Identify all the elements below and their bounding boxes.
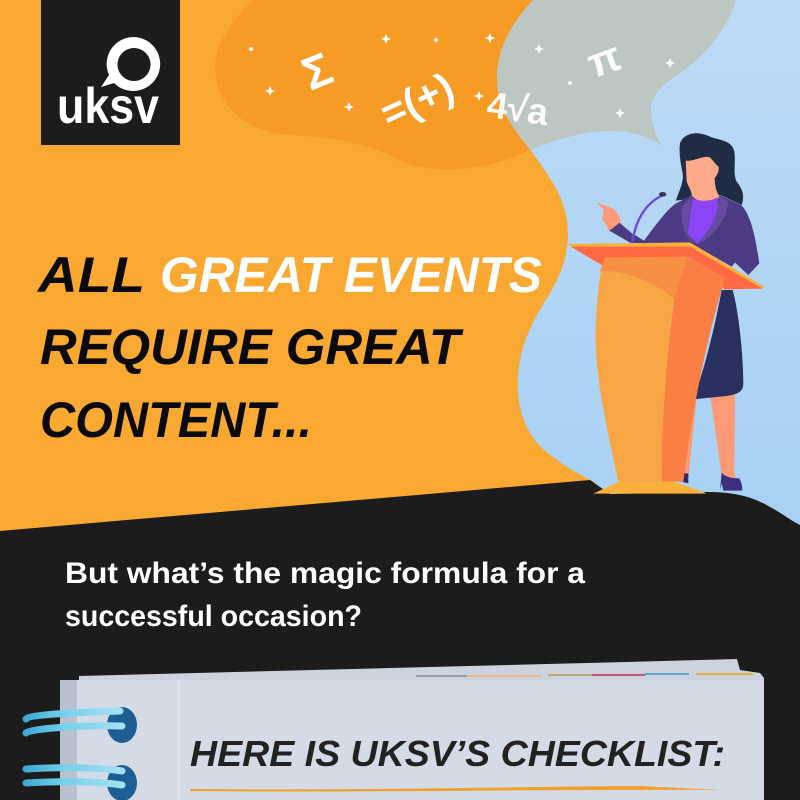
checklist heading: HERE IS UKSV’S CHECKLIST: <box>190 733 725 774</box>
hand <box>596 203 621 231</box>
spiral coils <box>26 711 122 785</box>
math symbol: equals plus: =(+) <box>373 64 461 137</box>
orange underline <box>190 786 720 792</box>
background: orange wave <box>0 0 595 535</box>
notebook back cover <box>60 680 82 800</box>
lectern top red face <box>571 247 763 289</box>
lectern body shade <box>661 257 725 482</box>
microphone head <box>659 192 666 197</box>
notebook page edges colored <box>416 673 753 677</box>
microphone <box>633 195 663 242</box>
logo <box>41 0 180 145</box>
headline <box>36 247 542 448</box>
near shoe <box>720 473 742 491</box>
math symbol: root: 4√a <box>484 84 551 133</box>
speaker at lectern <box>568 133 764 494</box>
lectern upper shade <box>600 257 687 302</box>
speech bubble <box>497 0 736 150</box>
subtitle <box>65 557 586 633</box>
logo wordmark: uksv <box>57 78 159 134</box>
headline line 2: REQUIRE GREAT <box>40 319 465 375</box>
notebook back pages <box>78 659 764 800</box>
math symbol: sigma: Σ <box>294 42 340 100</box>
headline line 1: ALL <box>36 247 145 303</box>
subtitle line 2: successful occasion? <box>65 600 362 633</box>
binding hole 2 <box>107 765 137 800</box>
subtitle line 1: But what’s the magic formula for a <box>65 557 586 590</box>
hair <box>676 133 743 205</box>
lapel <box>681 195 729 245</box>
lectern base <box>593 482 707 494</box>
lectern top yellow edge <box>568 242 764 289</box>
notebook front page <box>77 680 764 800</box>
skirt <box>693 290 743 399</box>
lectern body light <box>596 271 674 482</box>
face <box>686 157 720 202</box>
jacket <box>609 194 759 275</box>
far shoe <box>682 473 688 483</box>
notebook <box>26 659 764 800</box>
far leg <box>682 397 697 478</box>
logo icon: speech ring <box>101 37 160 91</box>
headline line 3: CONTENT... <box>40 392 312 448</box>
headline line 1: GREAT EVENTS <box>160 247 542 303</box>
notebook spine crease <box>178 680 179 800</box>
sparkle stars <box>249 33 675 118</box>
background: darker orange blob <box>215 0 533 170</box>
top <box>688 197 719 244</box>
bottom dark panel <box>0 480 800 800</box>
math symbol: pi: π <box>581 32 627 87</box>
binding hole 1 <box>107 707 137 743</box>
near leg <box>711 394 737 482</box>
